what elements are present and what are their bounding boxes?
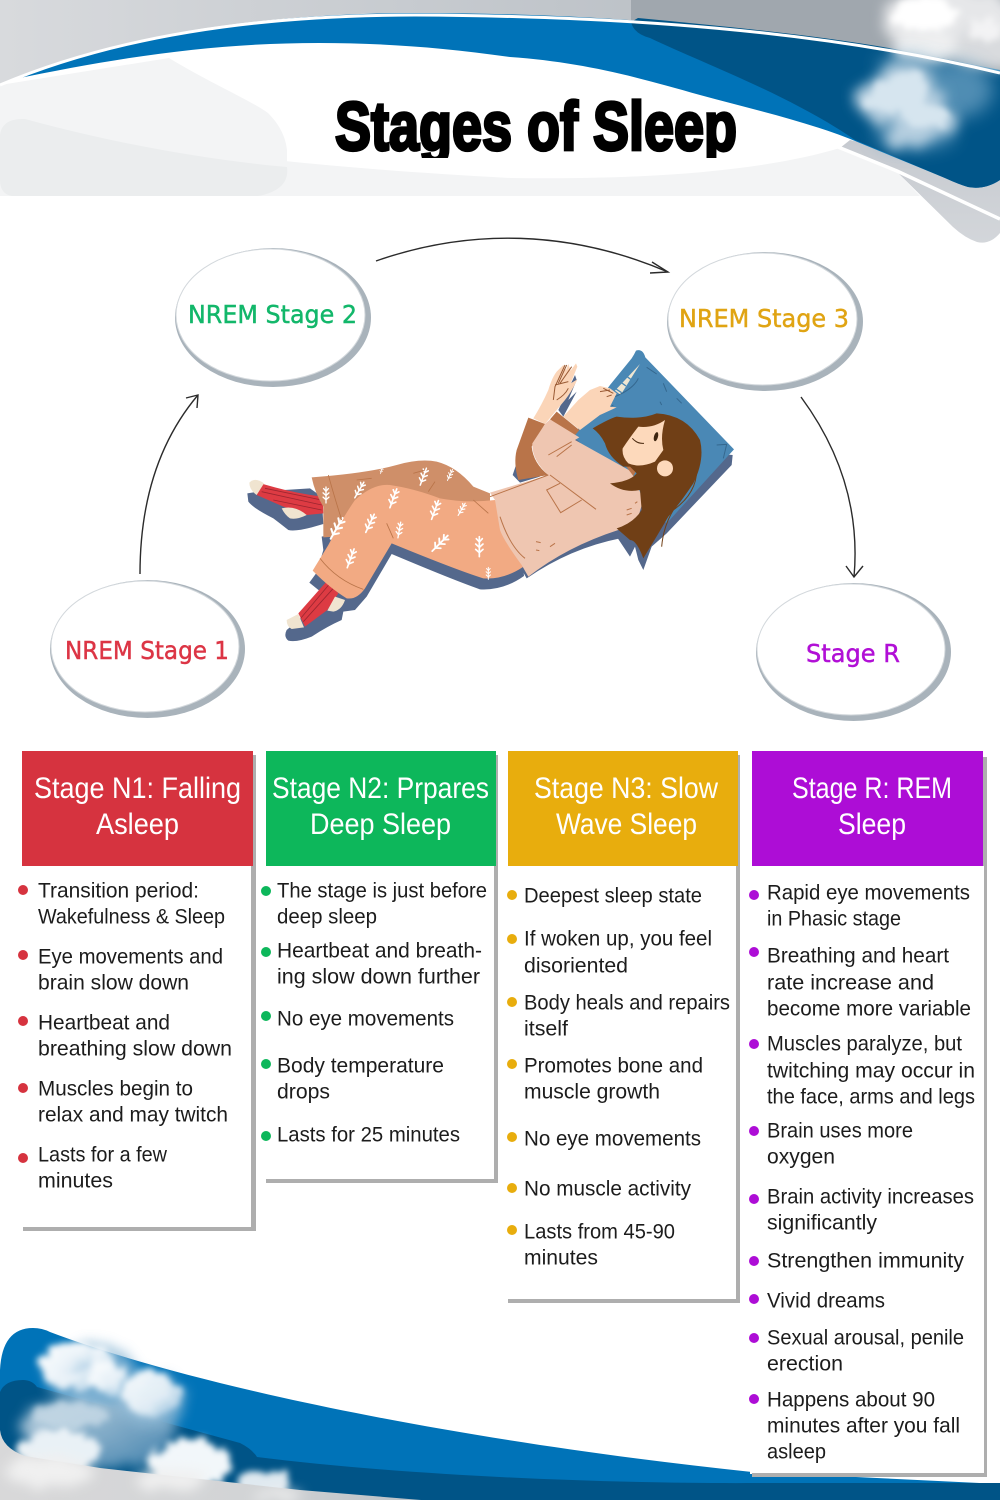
legs xyxy=(249,461,523,629)
bullet list: Stage N1: Heartbeat and xyxy=(38,1011,170,1034)
bullet list: Stage R: Muscles paralyze, but xyxy=(767,1032,962,1055)
bullet list: Stage R: minutes after you fall xyxy=(767,1414,960,1437)
header: Stage N1: Stage N1: Falling xyxy=(34,772,241,805)
bullet list: Stage N1: relax and may twitch xyxy=(38,1103,228,1126)
bullet list: Stage N3: muscle growth xyxy=(524,1080,660,1103)
figure shadow xyxy=(247,375,733,641)
bullet list: Stage N3: Body heals and repairs xyxy=(524,991,730,1014)
bullet list: Stage N3: No eye movements xyxy=(524,1127,701,1150)
header: Stage N1: Asleep xyxy=(96,808,179,841)
illustration: sleeping woman xyxy=(247,350,734,641)
bullet list: Stage N3: Promotes bone and xyxy=(524,1054,703,1077)
bullet list: Stage N1: Transition period: xyxy=(38,879,199,902)
bullet list: Stage N1 xyxy=(18,879,232,1192)
header: Stage N3: Stage N3: Slow xyxy=(534,772,718,805)
bullet list: Stage R: Breathing and heart xyxy=(767,944,949,967)
bullet list: Stage R: the face, arms and legs xyxy=(767,1085,975,1108)
bullet list: Stage R: in Phasic stage xyxy=(767,907,901,930)
arrow: stage 3 to stage R xyxy=(801,397,863,577)
clouds: top right xyxy=(858,0,1000,149)
stage node: NREM Stage 1 xyxy=(50,580,245,718)
bullet list: Stage R: Brain activity increases xyxy=(767,1185,974,1208)
panel: Stage N2 xyxy=(261,751,498,1183)
bottom grey band xyxy=(0,1430,421,1500)
stage node: NREM Stage 2 xyxy=(175,248,371,387)
bullet list: Stage N2: deep sleep xyxy=(277,905,377,928)
header: Stage N2: Deep Sleep xyxy=(310,808,451,841)
bullet list: Stage R: significantly xyxy=(767,1211,877,1234)
bullet list: Stage N2: Heartbeat and breath- xyxy=(277,939,482,962)
header: Stage N1 xyxy=(22,751,253,866)
bullet list: Stage N1: breathing slow down xyxy=(38,1037,232,1060)
panel: Stage N1 xyxy=(18,751,256,1231)
panel: Stage R xyxy=(749,751,987,1477)
bullet list: Stage N3 xyxy=(507,884,730,1269)
panel: Stage N3 xyxy=(507,751,740,1303)
bullet list: Stage N2: Body temperature xyxy=(277,1054,444,1077)
sock: back foot xyxy=(249,480,323,519)
bottom wave xyxy=(0,1328,1000,1500)
bullet list: Stage R: Rapid eye movements xyxy=(767,881,970,904)
bullet list: Stage N1: Wakefulness & Sleep xyxy=(38,905,225,928)
stage node: Stage R xyxy=(756,583,951,721)
bullet list: Stage N3: Lasts from 45-90 xyxy=(524,1220,675,1243)
bullet list: Stage R: erection xyxy=(767,1352,843,1375)
clouds: bottom left xyxy=(16,1342,290,1495)
bullet list: Stage N1: brain slow down xyxy=(38,971,189,994)
bullet list: Stage R: asleep xyxy=(767,1440,826,1463)
bullet list: Stage R: twitching may occur in xyxy=(767,1059,975,1082)
bullet list: Stage N2: No eye movements xyxy=(277,1007,454,1030)
title: Stages of Sleep xyxy=(335,88,737,165)
white accent lines xyxy=(0,15,1000,219)
stage node: NREM Stage 2: NREM Stage 2 xyxy=(188,300,357,329)
header: Stage R: Stage R: REM xyxy=(792,772,952,805)
bullet list: Stage N3: itself xyxy=(524,1017,568,1040)
bullet list: Stage R: Sexual arousal, penile xyxy=(767,1326,964,1349)
head and hair xyxy=(593,413,701,558)
header: Stage R: Sleep xyxy=(838,808,906,841)
bullet list: Stage N2 xyxy=(261,879,487,1146)
bullet list: Stage N3: disoriented xyxy=(524,954,628,977)
bullet list: Stage N1: minutes xyxy=(38,1169,113,1192)
header: Stage N3 xyxy=(508,751,738,866)
header: Stage N2: Stage N2: Prpares xyxy=(272,772,489,805)
bullet list: Stage R: Strengthen immunity xyxy=(767,1249,965,1272)
stage node: NREM Stage 3: NREM Stage 3 xyxy=(679,304,849,333)
bullet list: Stage N1: Muscles begin to xyxy=(38,1077,193,1100)
hands and back sleeve xyxy=(515,363,617,480)
bullet list: Stage R: Vivid dreams xyxy=(767,1289,885,1312)
bullet list: Stage N2: ing slow down further xyxy=(277,965,480,988)
clothing lines xyxy=(490,442,637,558)
stage node: NREM Stage 1: NREM Stage 1 xyxy=(65,636,229,665)
bullet list: Stage R: oxygen xyxy=(767,1145,835,1168)
pants seams xyxy=(320,470,488,589)
bullet list: Stage N3: No muscle activity xyxy=(524,1177,691,1200)
bullet list: Stage N2: The stage is just before xyxy=(277,879,487,902)
bullet list: Stage N3: Deepest sleep state xyxy=(524,884,702,907)
arrow: stage 1 to stage 2 xyxy=(140,395,198,574)
header: Stage N2 xyxy=(266,751,496,866)
bullet list: Stage N3: If woken up, you feel xyxy=(524,927,712,950)
pants: front leg xyxy=(313,485,523,599)
bullet list: Stage R xyxy=(749,881,975,1463)
header: Stage N3: Wave Sleep xyxy=(556,808,697,841)
pants pattern xyxy=(323,466,491,579)
bullet list: Stage N2: Lasts for 25 minutes xyxy=(277,1123,460,1146)
bullet list: Stage N1: Eye movements and xyxy=(38,945,223,968)
bullet list: Stage R: Brain uses more xyxy=(767,1119,913,1142)
stage node: Stage R: Stage R xyxy=(806,639,900,668)
bullet list: Stage R: become more variable xyxy=(767,997,971,1020)
pillow xyxy=(573,350,734,523)
bullet list: Stage N3: minutes xyxy=(524,1246,598,1269)
bullet list: Stage N1: Lasts for a few xyxy=(38,1143,168,1166)
arrow: stage 2 to stage 3 xyxy=(376,238,668,273)
bullet list: Stage R: Happens about 90 xyxy=(767,1388,935,1411)
stage node: NREM Stage 3 xyxy=(667,252,863,391)
torso xyxy=(490,419,643,577)
header background xyxy=(0,0,1000,245)
bullet list: Stage R: rate increase and xyxy=(767,971,934,994)
header: Stage R xyxy=(752,751,983,866)
sock: front foot xyxy=(287,581,345,629)
bullet list: Stage N2: drops xyxy=(277,1080,330,1103)
pants: back leg xyxy=(312,461,490,537)
